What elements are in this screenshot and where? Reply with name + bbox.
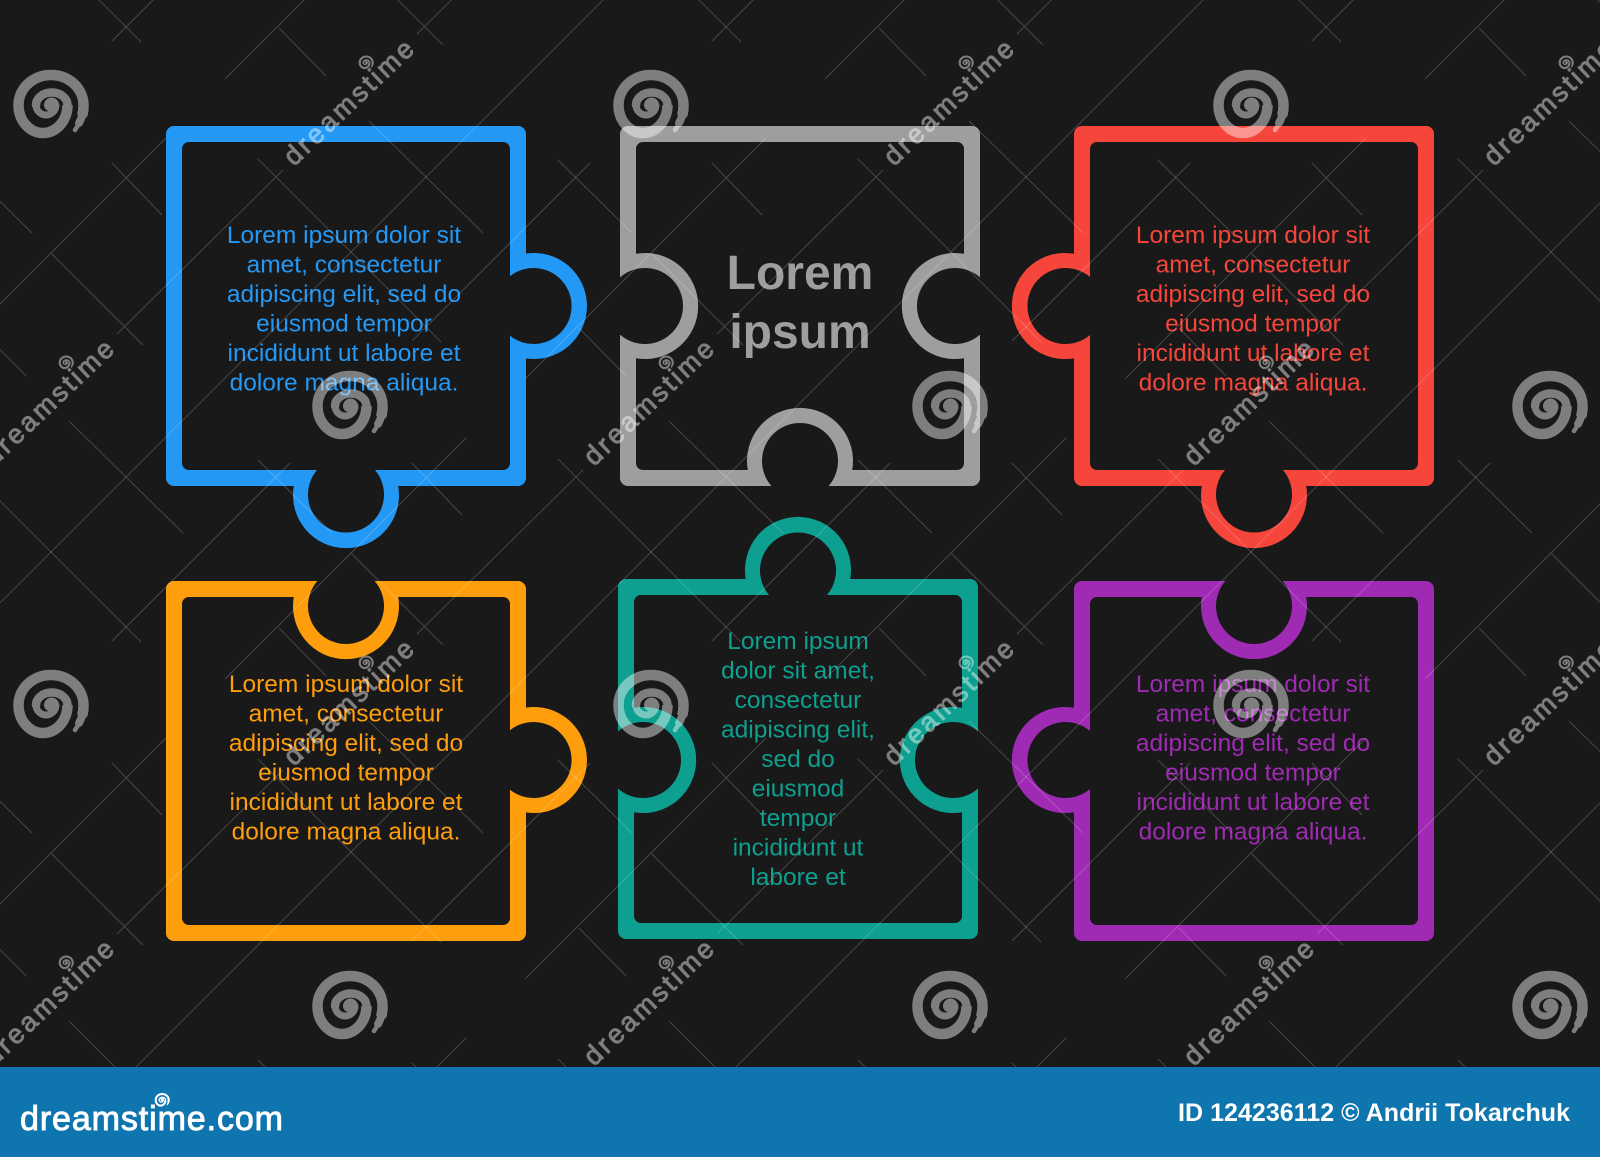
- text: teal piece: eiusmod: [752, 776, 844, 802]
- heading: Lorem ipsum: ipsum: [729, 306, 871, 359]
- image id and credit: ID 124236112 © Andrii Tokarchuk: [1178, 1099, 1570, 1127]
- puzzle piece: purple: [1012, 581, 1434, 941]
- puzzle piece: blue: [166, 126, 587, 548]
- text: teal piece: dolor sit amet,: [721, 658, 875, 684]
- footer bar: [0, 1067, 1600, 1157]
- text: teal piece: Lorem ipsum: [727, 628, 869, 655]
- text: orange piece: dolore magna aliqua.: [232, 818, 460, 846]
- text: orange piece: incididunt ut labore et: [230, 789, 463, 816]
- text: teal piece: adipiscing elit,: [721, 716, 875, 744]
- heading: Lorem ipsum: Lorem: [727, 247, 873, 300]
- text: purple piece: incididunt ut labore et: [1137, 789, 1370, 816]
- puzzle piece: grey title: [620, 126, 980, 486]
- text: purple piece: eiusmod tempor: [1165, 760, 1341, 786]
- text: orange piece: eiusmod tempor: [258, 760, 434, 786]
- puzzle piece: red: [1012, 126, 1434, 548]
- text: blue piece: Lorem ipsum dolor sit: [227, 222, 461, 249]
- text: blue piece: dolore magna aliqua.: [230, 370, 458, 396]
- text: purple piece: amet, consectetur: [1156, 700, 1350, 728]
- text: red piece: adipiscing elit, sed do: [1136, 281, 1370, 308]
- text: blue piece: eiusmod tempor: [256, 310, 432, 338]
- text: orange piece: amet, consectetur: [249, 700, 443, 728]
- logo: dreamstime.com: dreamstime.com: [20, 1100, 283, 1138]
- text: purple piece: Lorem ipsum dolor sit: [1136, 671, 1370, 698]
- text: teal piece: sed do: [761, 746, 835, 773]
- puzzle piece: teal: [618, 517, 978, 939]
- text: blue piece: adipiscing elit, sed do: [227, 281, 461, 308]
- text: teal piece: tempor: [760, 805, 836, 832]
- text: red piece: incididunt ut labore et: [1137, 340, 1370, 367]
- text: teal piece: labore et: [750, 864, 846, 891]
- text: red piece: dolore magna aliqua.: [1139, 370, 1367, 396]
- text: purple piece: adipiscing elit, sed do: [1136, 730, 1370, 757]
- text: red piece: eiusmod tempor: [1165, 310, 1341, 338]
- text: red piece: Lorem ipsum dolor sit: [1136, 222, 1370, 249]
- text: orange piece: Lorem ipsum dolor sit: [229, 671, 463, 698]
- text: teal piece: consectetur: [735, 687, 861, 714]
- text: purple piece: dolore magna aliqua.: [1139, 818, 1367, 846]
- text: blue piece: amet, consectetur: [247, 252, 441, 278]
- text: orange piece: adipiscing elit, sed do: [229, 730, 463, 757]
- puzzle piece: orange: [166, 581, 587, 941]
- text: teal piece: incididunt ut: [733, 834, 864, 862]
- text: blue piece: incididunt ut labore et: [228, 340, 461, 367]
- text: red piece: amet, consectetur: [1156, 252, 1350, 278]
